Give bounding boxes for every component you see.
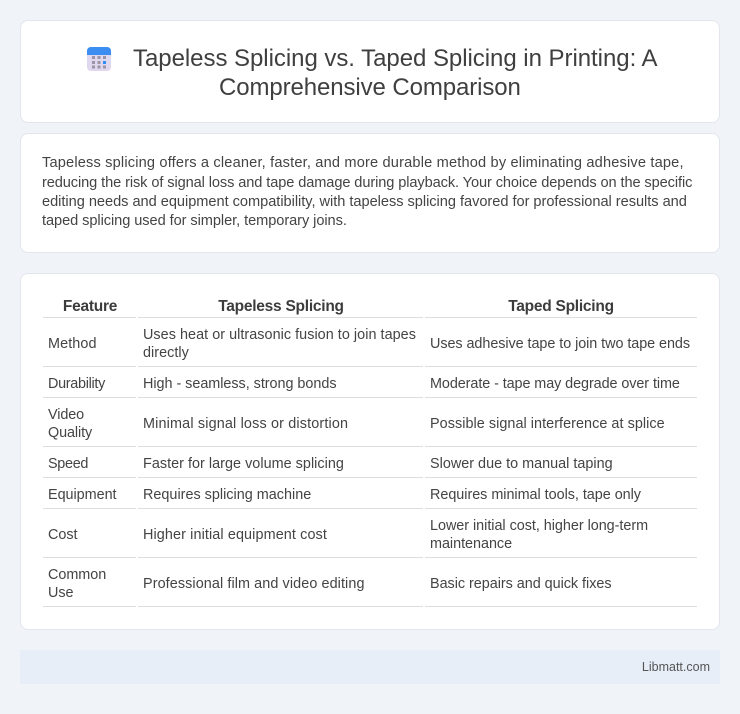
row: durability: Moderate - tape may degrade over time xyxy=(430,376,680,392)
row: cost: maintenance xyxy=(430,536,512,552)
row: video quality: Possible signal interference at splice xyxy=(430,416,665,432)
row: durability xyxy=(43,376,697,398)
row: equipment xyxy=(43,487,697,509)
row: common use xyxy=(43,567,697,607)
row: common use: Common xyxy=(48,567,106,583)
row: speed: Speed xyxy=(48,456,88,472)
row: cost: Lower initial cost, higher long-term xyxy=(430,518,648,534)
panel: summary text xyxy=(20,133,720,253)
row: common use: Basic repairs and quick fixes xyxy=(430,576,612,592)
table header row: Tapeless Splicing xyxy=(218,298,344,315)
summary paragraph: Tapeless splicing offers a cleaner, faster, and more durable method by eliminating adhesive tape, xyxy=(42,155,684,171)
summary paragraph: taped splicing used for simpler, temporary joins. xyxy=(42,213,347,229)
table header row xyxy=(43,298,697,318)
row: speed: Slower due to manual taping xyxy=(430,456,613,472)
row: video quality xyxy=(43,407,697,447)
panel: comparison table xyxy=(20,273,720,630)
summary paragraph xyxy=(42,155,692,229)
panel: title card xyxy=(20,20,720,123)
row: equipment: Requires splicing machine xyxy=(143,487,311,503)
row: durability: Durability xyxy=(48,376,105,392)
row: method: Method xyxy=(48,336,97,352)
row: durability: High - seamless, strong bonds xyxy=(143,376,336,392)
table header row: Feature xyxy=(63,298,117,315)
row: method: Uses heat or ultrasonic fusion to join tapes xyxy=(143,327,416,343)
row: video quality: Minimal signal loss or distortion xyxy=(143,416,348,432)
row: speed xyxy=(43,456,697,478)
row: speed: Faster for large volume splicing xyxy=(143,456,344,472)
row: video quality: Quality xyxy=(48,425,92,441)
row: method: Uses adhesive tape to join two tape ends xyxy=(430,336,690,352)
title xyxy=(133,45,658,101)
icon: calendar xyxy=(87,47,111,71)
footer bar xyxy=(20,650,720,684)
row: common use: Professional film and video editing xyxy=(143,576,365,592)
row: cost xyxy=(43,518,697,558)
row: cost: Higher initial equipment cost xyxy=(143,527,327,543)
row: cost: Cost xyxy=(48,527,77,543)
row: method: directly xyxy=(143,345,189,361)
table header row: Taped Splicing xyxy=(508,298,614,315)
row: video quality: Video xyxy=(48,407,84,423)
summary paragraph: editing needs and equipment compatibility, with tapeless splicing favored for professional results and xyxy=(42,194,687,210)
summary paragraph: reducing the risk of signal loss and tape damage during playback. Your choice depends on the specific xyxy=(42,175,692,191)
row: method xyxy=(43,327,697,367)
title: Comprehensive Comparison xyxy=(219,74,521,101)
title: Tapeless Splicing vs. Taped Splicing in Printing: A xyxy=(133,45,657,72)
footer credit: Libmatt.com xyxy=(642,660,710,674)
row: equipment: Requires minimal tools, tape only xyxy=(430,487,641,503)
row: equipment: Equipment xyxy=(48,487,117,503)
row: common use: Use xyxy=(48,585,74,601)
